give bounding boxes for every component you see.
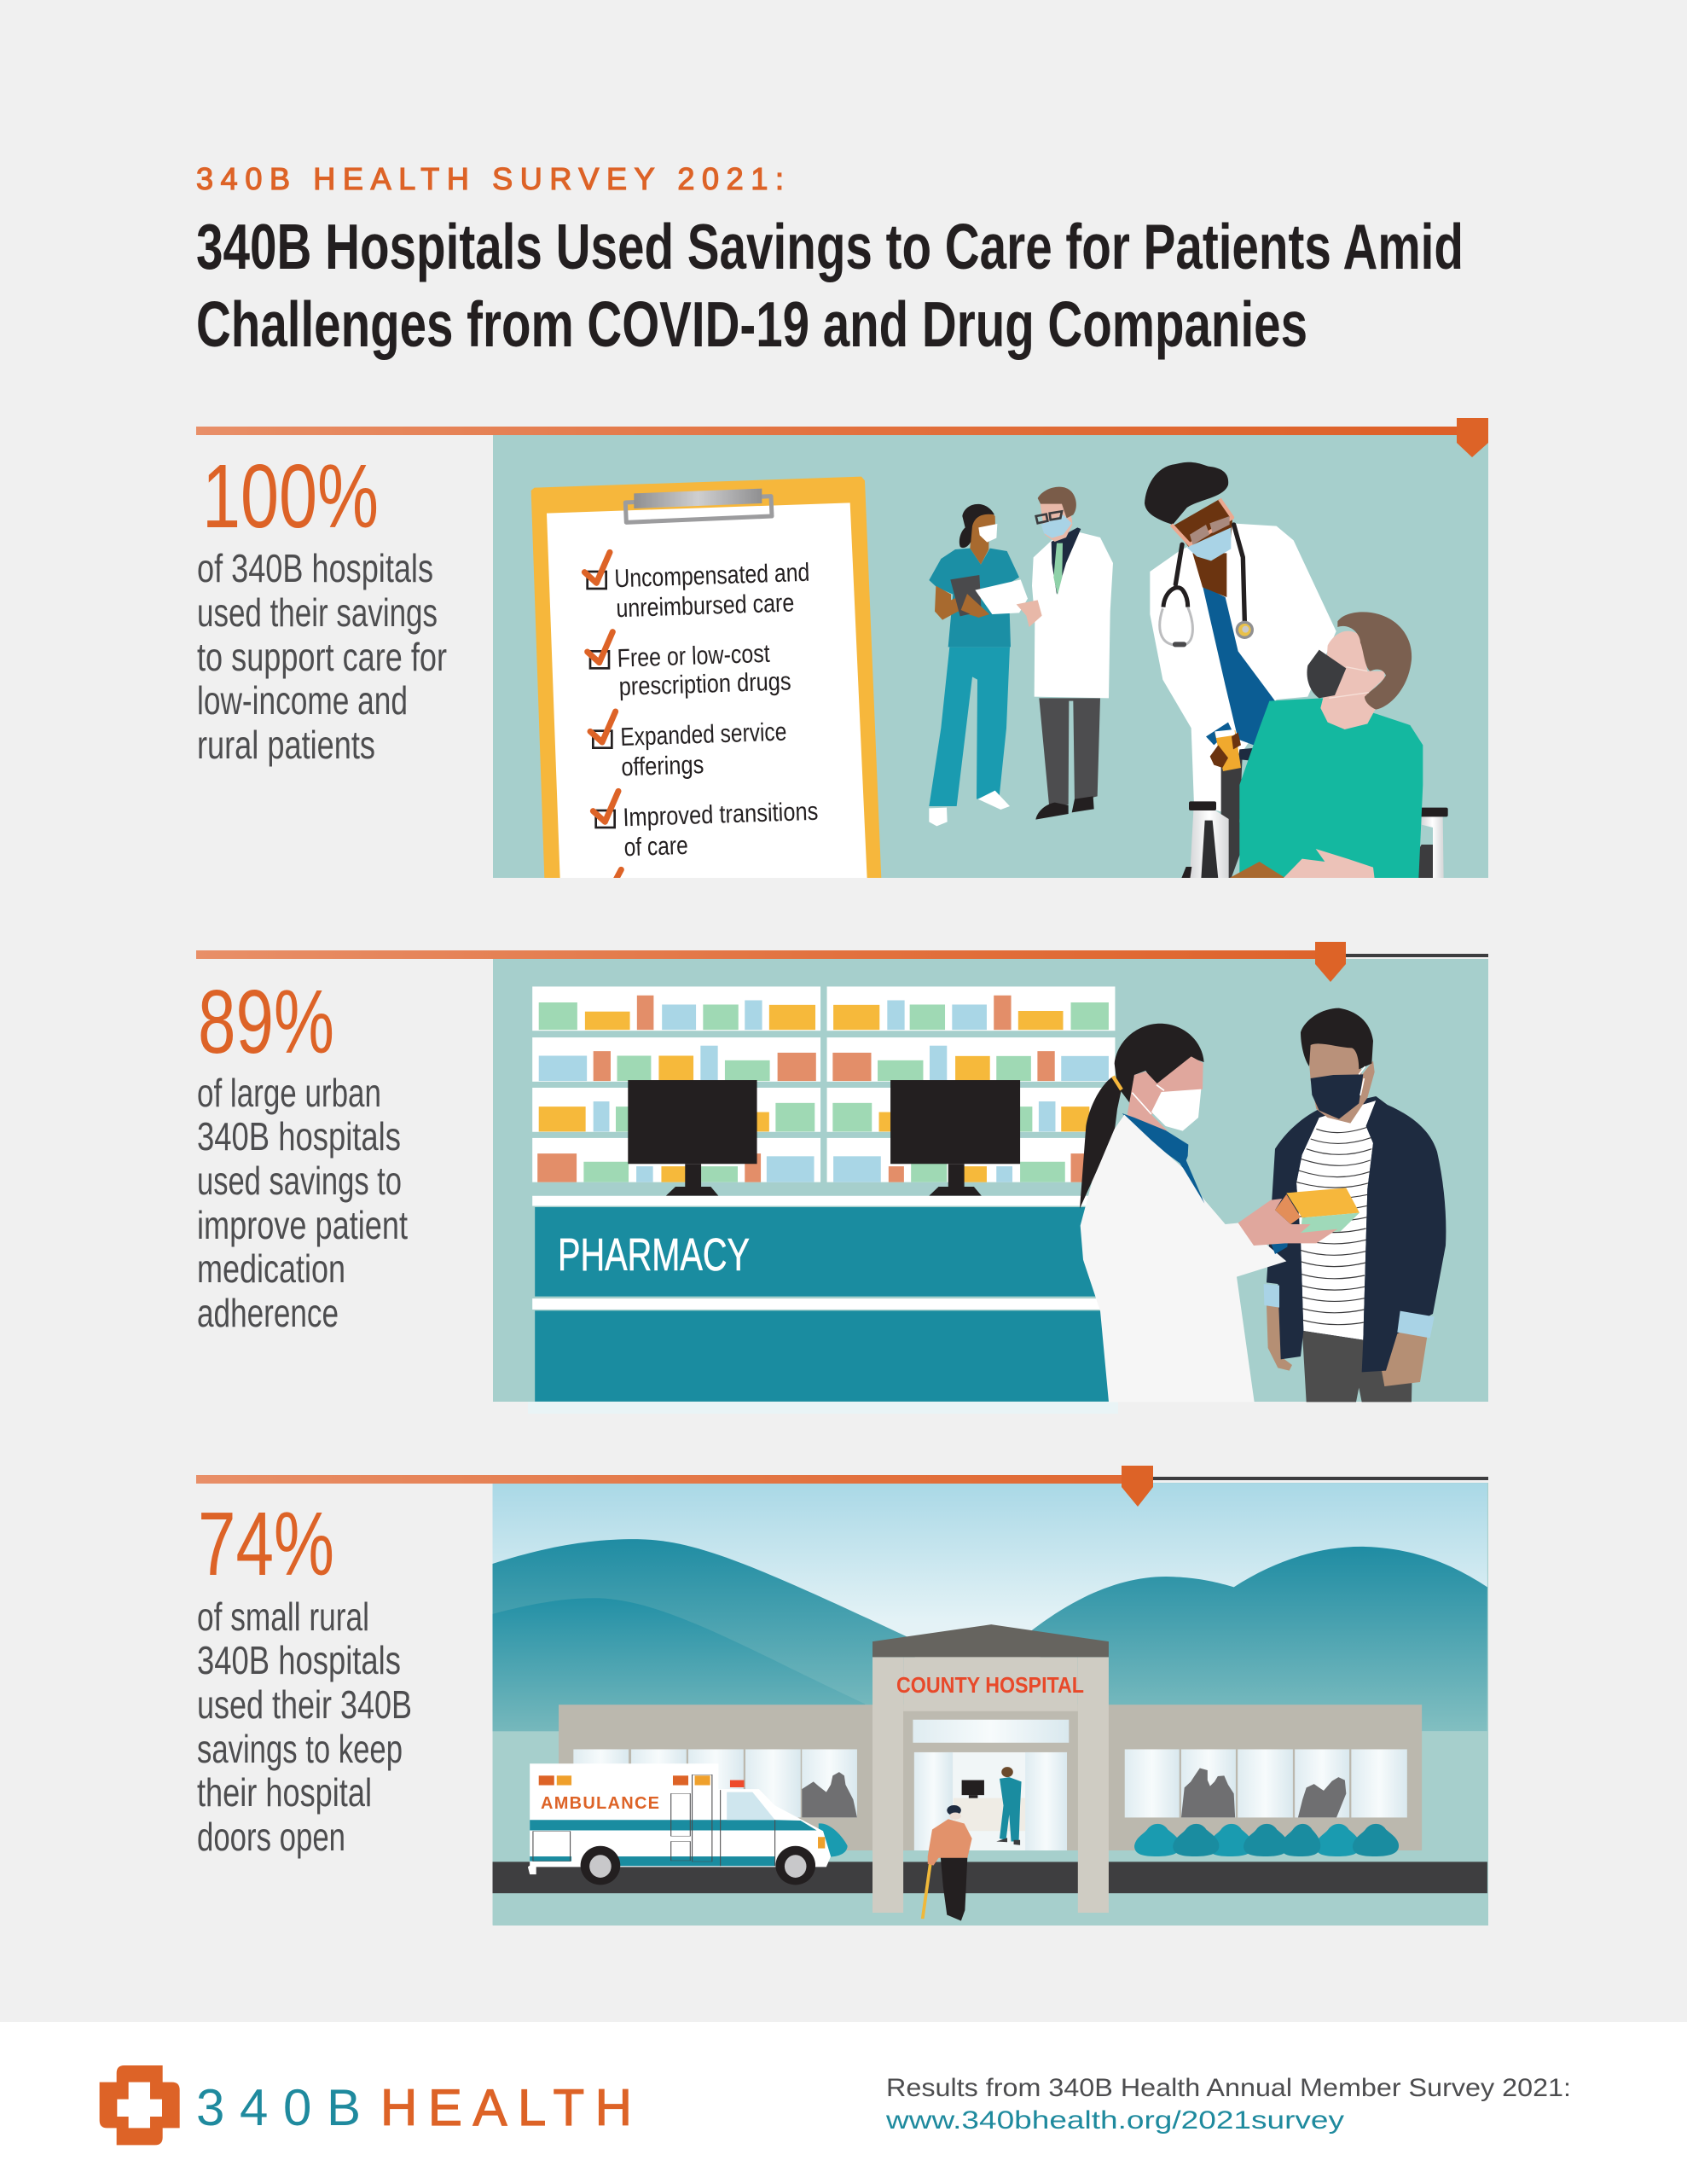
green medicine boxes bbox=[539, 1002, 1109, 1182]
source note: www.340bhealth.org/2021survey bbox=[885, 2106, 1344, 2135]
checklist text: of care bbox=[623, 832, 688, 862]
hospital sign: COUNTY HOSPITAL bbox=[896, 1672, 1084, 1698]
checklist text: prescription drugs bbox=[618, 667, 791, 701]
title bbox=[196, 211, 1464, 360]
panel: clipboard and clinicians bbox=[493, 435, 1488, 883]
ambulance bbox=[528, 1763, 831, 1885]
elderly man with cane bbox=[923, 1805, 972, 1920]
panel: county hospital bbox=[493, 1483, 1488, 1926]
description 100%: used their savings bbox=[197, 590, 438, 635]
stat block: 74% bbox=[196, 1466, 1488, 1926]
header bbox=[196, 161, 1464, 360]
checklist text: Uncompensated and bbox=[614, 559, 810, 593]
pharmacy shelves and counter bbox=[532, 986, 1115, 1402]
description 100%: to support care for bbox=[197, 635, 447, 679]
nurse at desk bbox=[996, 1767, 1022, 1845]
description 89%: of large urban bbox=[197, 1071, 381, 1115]
checklist text: offerings bbox=[621, 751, 704, 781]
title: Challenges from COVID-19 and Drug Companies bbox=[196, 288, 1307, 360]
description 100%: rural patients bbox=[197, 723, 375, 767]
stat block: 100% bbox=[196, 418, 1488, 883]
progress rule 89% bbox=[196, 942, 1488, 982]
landscaping bushes bbox=[819, 1823, 1399, 1857]
kicker: 340B HEALTH SURVEY 2021: bbox=[196, 161, 784, 196]
description 100%: of 340B hospitals bbox=[197, 546, 433, 590]
clipboard bbox=[531, 477, 881, 883]
number 89%: 89% bbox=[198, 972, 334, 1072]
pharmacist and patient bbox=[1080, 1008, 1446, 1402]
description 74%: 340B hospitals bbox=[197, 1638, 401, 1682]
description 74%: of small rural bbox=[197, 1594, 369, 1639]
description 74%: savings to keep bbox=[197, 1727, 403, 1771]
source note: Results from 340B Health Annual Member Survey 2021: bbox=[886, 2074, 1571, 2102]
hospital entrance bbox=[872, 1624, 1109, 1913]
number 100%: 100% bbox=[202, 446, 379, 547]
number 74%: 74% bbox=[198, 1494, 334, 1594]
description 89%: 340B hospitals bbox=[197, 1114, 401, 1159]
description 89%: used savings to bbox=[197, 1159, 402, 1203]
pharmacy sign: PHARMACY bbox=[558, 1229, 750, 1281]
logo wordmark: 340B bbox=[196, 2079, 361, 2136]
progress rule 100% bbox=[196, 418, 1488, 457]
hospital scene bbox=[493, 1483, 1487, 1926]
checklist text: Improved transitions bbox=[623, 798, 819, 832]
stat block: 89% bbox=[196, 942, 1488, 1414]
progress rule 74% bbox=[196, 1466, 1488, 1507]
checklist text: Expanded service bbox=[620, 718, 787, 752]
panel: pharmacy bbox=[493, 959, 1488, 1414]
red medicine boxes bbox=[537, 996, 1089, 1182]
blue medicine boxes bbox=[539, 1000, 1109, 1182]
computer monitors bbox=[628, 1080, 1020, 1196]
checklist text bbox=[614, 559, 819, 862]
logo cross icon bbox=[100, 2065, 180, 2145]
description 74%: their hospital bbox=[197, 1770, 372, 1815]
logo wordmark bbox=[196, 2079, 632, 2136]
description 74%: doors open bbox=[197, 1815, 345, 1859]
source note bbox=[885, 2074, 1571, 2135]
description 100% bbox=[197, 546, 447, 767]
checklist text: Free or low-cost bbox=[617, 640, 771, 673]
description 74%: used their 340B bbox=[197, 1682, 412, 1727]
description 89%: adherence bbox=[197, 1291, 339, 1335]
logo wordmark: HEALTH bbox=[380, 2079, 632, 2136]
footer bbox=[0, 2022, 1687, 2184]
doctor and patient in wheelchair bbox=[1145, 462, 1448, 879]
checklist text: unreimbursed care bbox=[616, 589, 795, 623]
description 100%: low-income and bbox=[197, 678, 408, 723]
description 74% bbox=[197, 1594, 412, 1859]
yellow medicine boxes bbox=[539, 1005, 1089, 1182]
hospital windows bbox=[573, 1749, 1407, 1817]
description 89%: improve patient bbox=[197, 1203, 408, 1247]
description 89%: medication bbox=[197, 1246, 345, 1291]
ambulance label: AMBULANCE bbox=[541, 1794, 659, 1813]
nurse and doctor bbox=[929, 487, 1113, 826]
description 89% bbox=[197, 1071, 408, 1335]
